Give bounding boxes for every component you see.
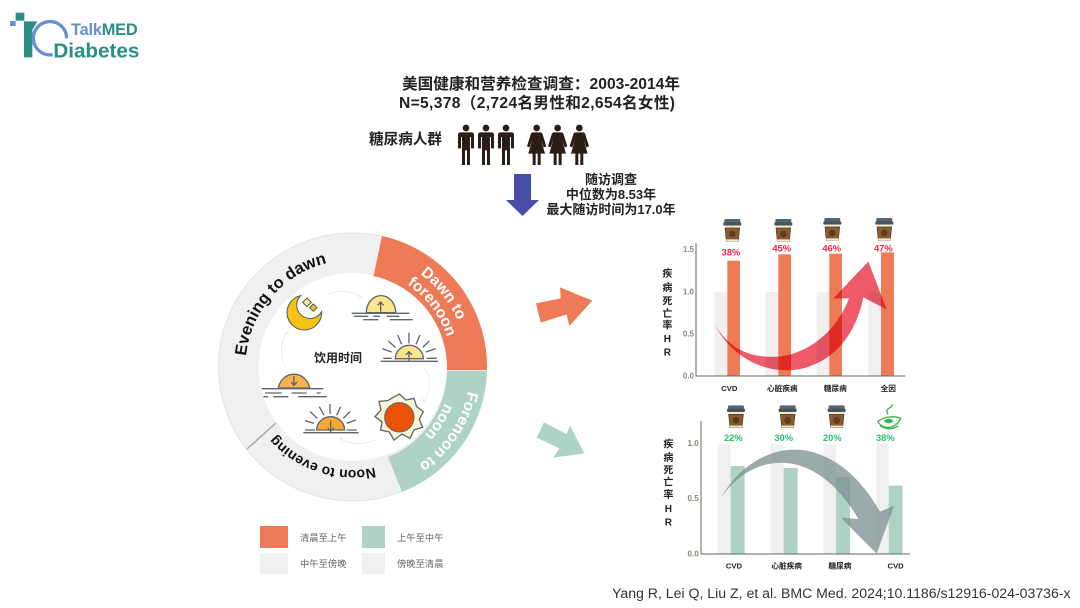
y axis ticks: 0.0: [688, 549, 699, 558]
follow-up text: 中位数为8.53年: [566, 187, 656, 202]
y axis title: [662, 267, 672, 358]
arrow: teal to lower chart: [537, 422, 584, 458]
y axis ticks: [683, 245, 695, 380]
wheel background ring: [238, 253, 466, 481]
y axis title: 亡: [662, 307, 672, 320]
label: diabetes population: 糖尿病人群: [369, 130, 442, 148]
label: noon: noon: [425, 404, 452, 439]
percentages: [722, 244, 893, 258]
y axis title: 疾: [662, 267, 672, 280]
y axis title: 死: [662, 295, 672, 307]
swatch: evening to dawn: [362, 553, 385, 574]
percentages: 30%: [774, 433, 794, 443]
citation: Yang R, Lei Q, Liu Z, et al. BMC Med. 2024;10.1186/s12916-024-03736-x: [612, 585, 1071, 601]
category labels: 糖尿病: [828, 560, 852, 570]
bars: reference: [714, 292, 881, 376]
icon: moon: [287, 296, 322, 330]
arrow: blue down arrow: [506, 174, 539, 216]
category labels: 心脏疾病: [771, 560, 802, 570]
category labels: 心脏疾病: [767, 383, 798, 393]
wheel outer edge: [218, 233, 486, 501]
y axis ticks: 0.5: [688, 494, 699, 503]
bars: dawn to forenoon: [727, 252, 894, 376]
y axis title: H: [664, 334, 671, 345]
segment divider: [247, 423, 276, 449]
y axis title: 病: [662, 281, 672, 294]
y axis ticks: 1.0: [683, 287, 695, 296]
y axis ticks: [688, 439, 699, 558]
category labels: CVD: [721, 384, 738, 393]
legend: [260, 526, 444, 574]
y axis ticks: 1.0: [688, 439, 699, 448]
title: [399, 74, 680, 112]
percentages: 22%: [724, 433, 743, 443]
follow-up text: 随访调查: [585, 172, 637, 187]
swatch: noon to evening: [260, 553, 288, 574]
arrow: orange to upper chart: [536, 287, 592, 326]
label: noon to evening: Noon to evening: [270, 435, 376, 479]
category labels: [721, 383, 896, 393]
logo: TalkMED Diabetes: Diabetes: [53, 39, 139, 62]
swatch: dawn to forenoon: [260, 526, 288, 548]
icon: three men and three women: [458, 125, 589, 165]
label: forenoon to: Forenoon to: [420, 392, 478, 470]
bars: forenoon to noon: [731, 466, 903, 554]
arrow: grey falling curve: [722, 450, 894, 554]
bars: reference: [718, 444, 889, 554]
percentages: 47%: [874, 244, 893, 254]
y axis title: 疾: [663, 438, 673, 451]
legend text: evening to dawn: 傍晚至清晨: [397, 558, 444, 569]
y axis title: R: [665, 517, 672, 528]
logo: TalkMED Diabetes: [10, 13, 139, 62]
chart: lower bar chart, reduced mortality risk: [663, 404, 910, 570]
legend text: forenoon to noon: 上午至中午: [397, 532, 444, 543]
y axis ticks: 0.0: [683, 371, 695, 380]
icon: noon sun: [375, 394, 423, 440]
icon: green tea cup: [878, 404, 901, 429]
category labels: 糖尿病: [824, 383, 847, 393]
y axis title: 率: [662, 319, 672, 332]
y axis title: [663, 438, 673, 528]
coffee cups: [723, 218, 893, 241]
icon: sunset: [262, 374, 327, 397]
axes: [701, 421, 910, 554]
title: N=5,378（2,724名男性和2,654名女性): [399, 93, 675, 112]
label: forenoon: forenoon: [408, 276, 454, 336]
percentages: 45%: [772, 244, 792, 254]
y axis title: 亡: [663, 475, 673, 488]
y axis title: R: [664, 347, 671, 358]
cycle arrows: [281, 291, 430, 444]
title: 美国健康和营养检查调查：2003-2014年: [402, 74, 680, 93]
axes: [696, 243, 905, 376]
follow-up text: 最大随访时间为17.0年: [546, 202, 676, 217]
category labels: [726, 560, 904, 570]
icon: sunrise: [352, 296, 413, 320]
y axis title: 死: [663, 465, 673, 477]
category labels: 全因: [881, 383, 896, 393]
category labels: CVD: [726, 561, 743, 570]
percentages: 20%: [823, 433, 842, 443]
percentages: 46%: [822, 244, 842, 254]
logo: TalkMED Diabetes: TalkMED: [71, 21, 138, 39]
segment: forenoon to noon: [388, 371, 487, 492]
percentages: 38%: [876, 433, 895, 443]
y axis ticks: 1.5: [683, 245, 695, 254]
coffee cups: [727, 405, 846, 428]
category labels: CVD: [888, 561, 904, 570]
legend text: dawn to forenoon: 清晨至上午: [300, 532, 346, 543]
icon: sun rising with rays: [381, 333, 438, 361]
swatch: forenoon to noon: [362, 526, 385, 548]
chart: timing wheel: [218, 232, 488, 502]
arrow: red rising curve: [715, 262, 887, 370]
y axis title: 病: [663, 451, 673, 464]
label: drinking time: 饮用时间: [314, 350, 362, 365]
label: evening to dawn: Evening to dawn: [234, 256, 326, 355]
icon: sun setting with rays: [303, 404, 359, 433]
label: dawn to: Dawn to: [421, 266, 464, 319]
chart: upper bar chart, increased mortality risk: [662, 218, 905, 393]
y axis title: H: [665, 504, 672, 515]
percentages: 38%: [722, 248, 741, 258]
segment: dawn to forenoon: [374, 236, 487, 370]
y axis ticks: 0.5: [683, 330, 695, 339]
y axis title: 率: [663, 488, 673, 501]
follow-up text: [546, 172, 676, 217]
legend text: noon to evening: 中午至傍晚: [300, 558, 346, 569]
percentages: [724, 433, 895, 443]
